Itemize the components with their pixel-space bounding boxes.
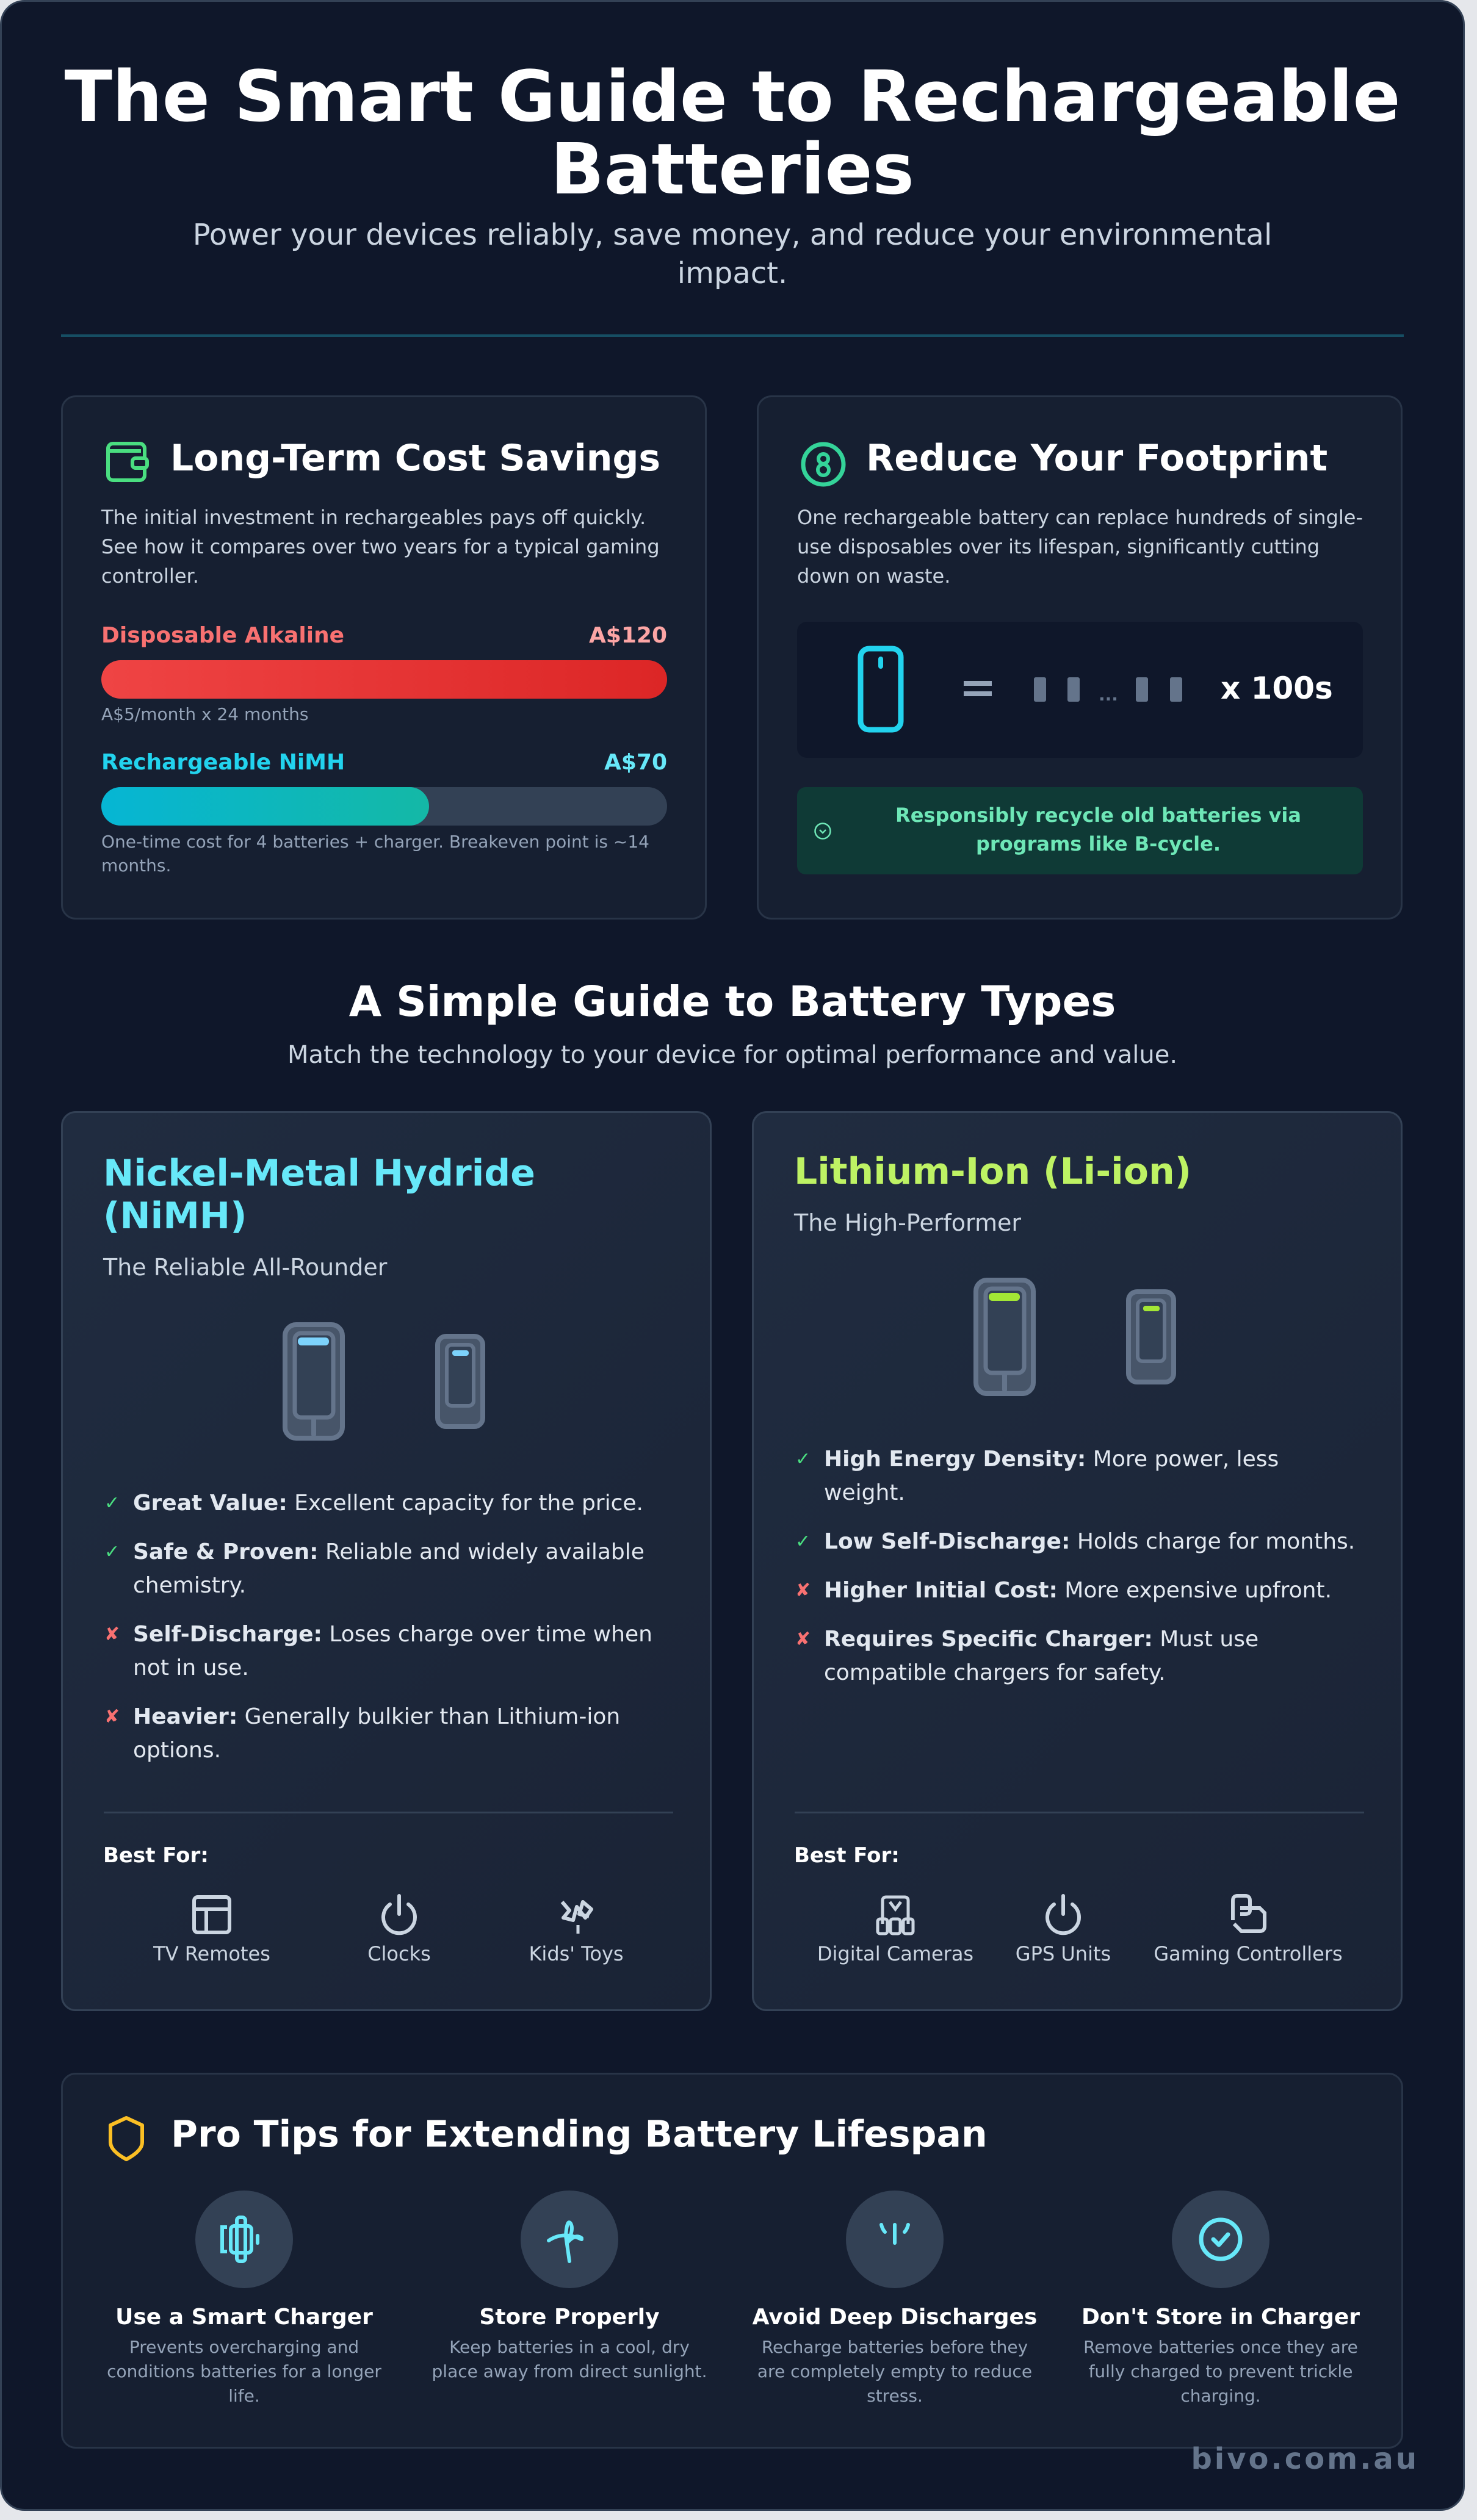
card: Li-ion: ✘ <box>795 1629 811 1650</box>
best for: Best For: <box>794 1843 900 1868</box>
label: disposable: A$120 <box>589 623 667 648</box>
text: down on waste. <box>797 564 950 588</box>
panel: footprint <box>757 395 1403 920</box>
recycle callout: Responsibly recycle old batteries via <box>895 804 1301 827</box>
tip: don't store in charger <box>1068 2191 1373 2408</box>
label: rechargeable: Rechargeable NiMH <box>101 750 345 775</box>
card: Li-ion: Requires Specific Charger: Must use <box>824 1627 1259 1652</box>
panel: pro tips <box>61 2073 1403 2449</box>
bullets <box>795 1447 1279 1505</box>
card: NiMH: Self-Discharge: Loses charge over time when <box>133 1622 652 1647</box>
icon: GPS <box>1016 1894 1111 1965</box>
tip: smart charger: Use a Smart Charger <box>115 2305 373 2330</box>
card: NiMH: Heavier: Generally bulkier than Lithium-ion <box>133 1704 620 1729</box>
icon: TV remotes <box>153 1895 270 1965</box>
heading: Reduce Your Footprint <box>866 437 1327 480</box>
card: Li-ion: weight. <box>824 1480 905 1505</box>
tip: smart charger: life. <box>228 2386 260 2406</box>
best for: Best For: <box>103 1843 209 1868</box>
text <box>797 506 1363 588</box>
title: Nickel-Metal Hydride <box>103 1152 535 1195</box>
text: use disposables over its lifespan, significantly cutting <box>797 535 1320 558</box>
tip: smart charger: Prevents overcharging and <box>129 2337 359 2357</box>
tip: smart charger: conditions batteries for a longer <box>107 2361 381 2381</box>
comparison box <box>797 622 1363 758</box>
icon: cameras: Digital Cameras <box>817 1942 973 1965</box>
card: NiMH: ✘ <box>104 1624 120 1645</box>
text: controller. <box>101 564 199 588</box>
subtitle: The High-Performer <box>794 1209 1021 1236</box>
card: Li-ion <box>752 1111 1403 2011</box>
subtitle: The Reliable All-Rounder <box>103 1254 387 1281</box>
card: Li-ion: Low Self-Discharge: Holds charge for months. <box>824 1529 1355 1554</box>
title: The Smart Guide to Rechargeable <box>65 56 1400 138</box>
tip: avoid deep discharges: are completely empty to reduce <box>757 2361 1032 2381</box>
note: A$5/month x 24 months <box>101 704 308 724</box>
label: disposable: Disposable Alkaline <box>101 623 344 648</box>
recycle callout: programs like B-cycle. <box>976 832 1221 855</box>
text: See how it compares over two years for a typical gaming <box>101 535 660 558</box>
card: Li-ion: ✓ <box>795 1449 811 1470</box>
tip: avoid deep discharges: stress. <box>867 2386 923 2406</box>
text: One rechargeable battery can replace hundreds of single- <box>797 506 1363 529</box>
multiplier: x 100s <box>1221 671 1333 706</box>
icon: GPS: GPS Units <box>1016 1942 1111 1965</box>
icon: toys: Kids' Toys <box>529 1942 624 1965</box>
tip: don't store in charger: fully charged to prevent trickle <box>1089 2361 1352 2381</box>
icon: cameras <box>817 1895 973 1965</box>
tip: store properly: Keep batteries in a cool, dry <box>449 2337 690 2357</box>
label: rechargeable <box>101 750 667 775</box>
note <box>101 832 649 876</box>
icon: disposables <box>1034 677 1182 705</box>
title: Lithium-Ion (Li-ion) <box>794 1150 1191 1193</box>
tip: don't store in charger: Remove batteries once they are <box>1083 2337 1358 2357</box>
watermark: bivo.com.au <box>1191 2442 1419 2476</box>
panel: cost savings <box>61 395 707 920</box>
icon: clocks <box>367 1894 431 1965</box>
recycle callout <box>797 787 1363 874</box>
tip: avoid deep discharges <box>742 2191 1047 2408</box>
best for <box>794 1843 1343 1965</box>
tip: store properly: place away from direct sunlight. <box>432 2361 707 2381</box>
icon: rechargeable battery <box>858 646 903 732</box>
card: NiMH <box>61 1111 712 2011</box>
icon: wallet <box>106 442 149 482</box>
title <box>103 1152 535 1237</box>
icon: clocks: Clocks <box>367 1942 431 1965</box>
title: Batteries <box>551 129 914 211</box>
section subtitle: Match the technology to your device for optimal performance and value. <box>287 1041 1177 1069</box>
card: NiMH: ✓ <box>104 1541 120 1563</box>
bullets <box>104 1491 643 1516</box>
note: months. <box>101 855 171 876</box>
icon: disposables: ... <box>1099 685 1118 705</box>
bar: rechargeable <box>101 787 667 826</box>
heading: Pro Tips for Extending Battery Lifespan <box>171 2113 988 2156</box>
tip: store properly: Store Properly <box>479 2305 660 2330</box>
title <box>65 56 1400 211</box>
tip: avoid deep discharges: Avoid Deep Discharges <box>753 2305 1037 2330</box>
illustration: batteries <box>973 1278 1176 1396</box>
best for <box>103 1843 624 1965</box>
card: NiMH: Safe & Proven: Reliable and widely available <box>133 1539 645 1564</box>
icon: recycle <box>801 442 846 487</box>
label: rechargeable: A$70 <box>604 750 667 775</box>
card: NiMH: Great Value: Excellent capacity for the price. <box>133 1491 643 1516</box>
card: NiMH: ✘ <box>104 1706 120 1727</box>
heading: Long-Term Cost Savings <box>170 437 660 480</box>
card: Li-ion: Higher Initial Cost: More expensive upfront. <box>824 1578 1332 1603</box>
card: Li-ion: compatible chargers for safety. <box>824 1660 1166 1685</box>
card: Li-ion: ✘ <box>795 1580 811 1601</box>
tip: don't store in charger: Don't Store in Charger <box>1082 2305 1360 2330</box>
subtitle <box>193 218 1272 290</box>
icon: controllers <box>1154 1894 1343 1965</box>
section heading: A Simple Guide to Battery Types <box>349 977 1116 1026</box>
illustration: batteries <box>283 1322 485 1441</box>
subtitle: impact. <box>677 256 787 290</box>
card: NiMH: options. <box>133 1738 221 1763</box>
note: One-time cost for 4 batteries + charger. Breakeven point is ~14 <box>101 832 649 852</box>
card: NiMH: not in use. <box>133 1655 249 1680</box>
card: NiMH: chemistry. <box>133 1573 246 1598</box>
tip: don't store in charger: charging. <box>1180 2386 1261 2406</box>
title: (NiMH) <box>103 1195 247 1237</box>
icon: controllers: Gaming Controllers <box>1154 1942 1343 1965</box>
text: The initial investment in rechargeables pays off quickly. <box>101 506 646 529</box>
subtitle: Power your devices reliably, save money, and reduce your environmental <box>193 218 1272 252</box>
icon: shield <box>107 2115 146 2162</box>
tip: smart charger <box>92 2191 397 2408</box>
tip: avoid deep discharges: Recharge batteries before they <box>762 2337 1028 2357</box>
card: Li-ion: High Energy Density: More power, less <box>824 1447 1279 1472</box>
bar: disposable <box>101 660 667 699</box>
text <box>101 506 660 588</box>
card: Li-ion: ✓ <box>795 1531 811 1552</box>
label: disposable <box>101 623 667 648</box>
tip: store properly <box>417 2191 722 2384</box>
card: NiMH: ✓ <box>104 1492 120 1514</box>
icon: TV remotes: TV Remotes <box>153 1942 270 1965</box>
icon: toys <box>529 1900 624 1965</box>
